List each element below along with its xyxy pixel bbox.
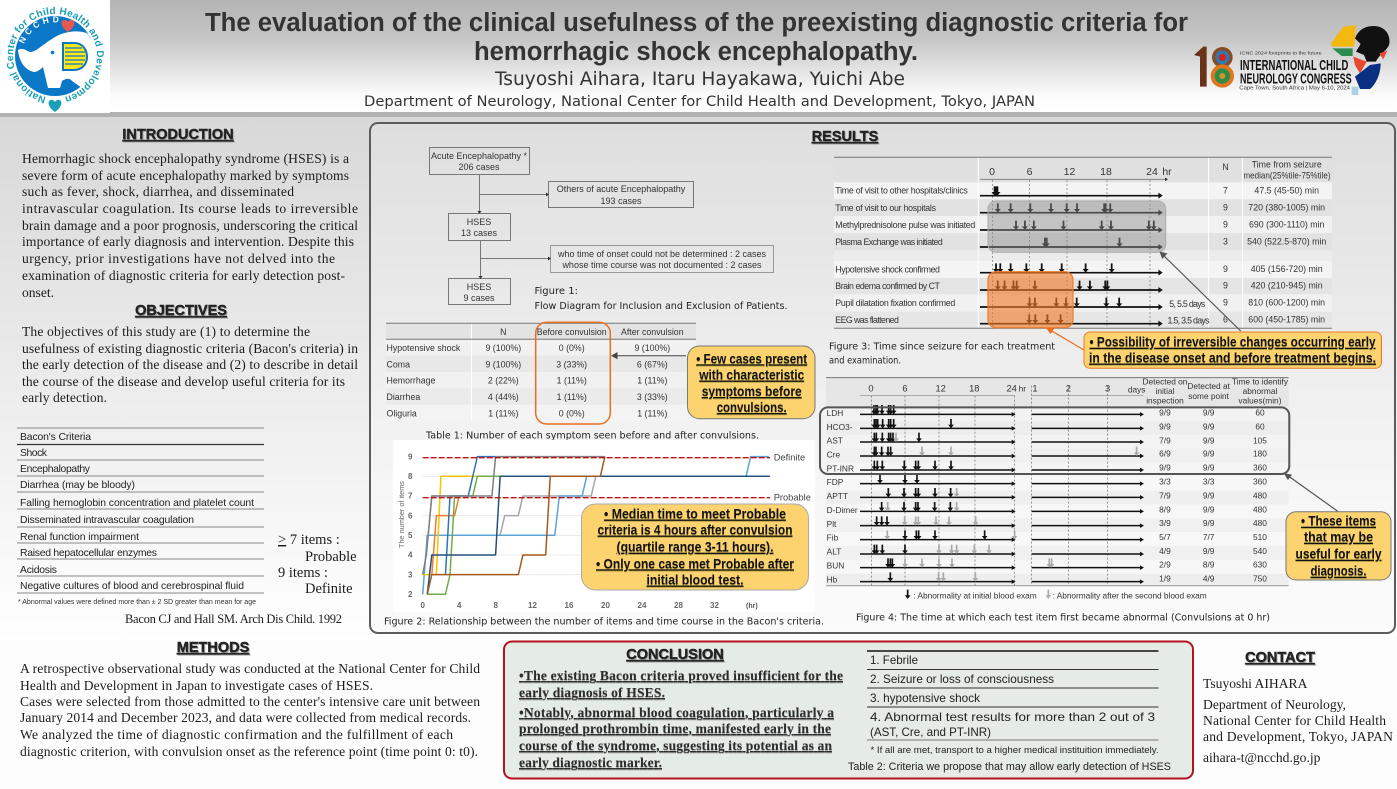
figure 3: timeline chart: 6: [1027, 166, 1033, 178]
table values: 60: [1255, 421, 1265, 431]
panel: results: [370, 123, 1395, 633]
table 1: symptoms before and after convulsions: 6 (67%): [637, 359, 668, 369]
callout: useful items: useful for early: [1296, 547, 1382, 562]
callout: few cases: with characteristic: [698, 368, 805, 382]
right notes and values: 720 (380-1005) min: [1248, 202, 1325, 212]
right notes and values: 540 (522.5-870) min: [1247, 236, 1326, 246]
section: introduction: INTRODUCTION: [122, 127, 234, 143]
table 1: symptoms before and after convulsions: After convulsion: [621, 327, 684, 337]
conclusion text: •Notably, abnormal blood coagulation, particularly a: [519, 705, 834, 720]
table 1: symptoms before and after convulsions: Hypotensive shock: [386, 343, 461, 353]
table values: 7/9: [1159, 435, 1171, 445]
table: Bacon's criteria: Negative cultures of blood and cerebrospinal fluid: [20, 581, 244, 592]
table 1: symptoms before and after convulsions: 0 (0%): [559, 343, 585, 353]
table: Bacon's criteria: * Abnormal values were defined more than ± 2 SD greater than mean for age: [18, 599, 256, 606]
table values: values(min): [1238, 395, 1282, 405]
row labels: Cre: [827, 450, 840, 460]
table values: 510: [1253, 532, 1267, 542]
arrow: callout to highlighted rows: [1285, 474, 1338, 512]
methods text: Health and Development in Japan to investigate cases of HSES.: [20, 678, 373, 693]
overlay: early changes group: [988, 272, 1073, 328]
contact details: National Center for Child Health: [1203, 713, 1386, 728]
figure 3: timeline chart: 0: [989, 166, 995, 178]
reference: Bacon CJ and Hall SM. Arch Dis Child. 1992: [125, 612, 342, 626]
table 2: proposed criteria: [848, 651, 1171, 773]
section: objectives: [22, 303, 358, 405]
contact details: and Development, Tokyo, JAPAN: [1203, 729, 1393, 744]
callout: few cases: symptoms before: [702, 384, 802, 399]
table values: 9/9: [1203, 504, 1215, 514]
table 1: symptoms before and after convulsions: 9 (100%): [485, 359, 521, 369]
row labels: APTT: [827, 491, 848, 501]
table: Bacon's criteria: Shock: [20, 448, 48, 459]
criteria thresholds: Probable: [305, 549, 357, 565]
table 1: symptoms before and after convulsions: 2 (22%): [488, 376, 519, 386]
callout: median time: initial blood test.: [646, 572, 744, 588]
right notes and values: 600 (450-1785) min: [1248, 314, 1325, 324]
table values: 360: [1253, 463, 1267, 473]
right notes and values: 9: [1223, 264, 1228, 274]
callout: useful items: diagnosis.: [1310, 564, 1366, 579]
callout: irreversible changes: [1084, 332, 1382, 368]
figure 4: first abnormal time chart: [820, 376, 1289, 600]
figure 2: line chart: 8: [494, 601, 498, 610]
objectives text: usefulness of existing diagnostic criteria (Bacon's criteria) in: [22, 341, 358, 357]
right notes and values: 405 (156-720) min: [1251, 264, 1323, 274]
table 2: proposed criteria: Table 2: Criteria we propose that may allow early detection of HSES: [848, 761, 1171, 773]
introduction text: severe form of acute encephalopathy marked by symptoms: [22, 168, 349, 183]
table values: 7/7: [1203, 532, 1215, 542]
introduction text: [22, 151, 358, 300]
row labels: Time of visit to our hospitals: [835, 203, 937, 213]
figure 1: flow diagram: Acute Encephalopathy *: [431, 151, 528, 161]
conclusion text: early diagnosis of HSES.: [519, 685, 665, 700]
table 2: proposed criteria: 3. hypotensive shock: [870, 691, 981, 705]
objectives text: the early detection of the disease and (2) to describe in detail: [22, 357, 358, 373]
axis labels: [868, 384, 1145, 394]
criteria thresholds: Definite: [305, 581, 353, 597]
section: methods: METHODS: [177, 640, 250, 656]
figure 1: flow diagram: Figure 1:: [534, 286, 578, 297]
table values: 2/9: [1159, 559, 1171, 569]
introduction text: brain damage and a poor prognosis, underscoring the critical: [22, 218, 358, 233]
right notes and values: 6: [1223, 314, 1228, 324]
table values: initial: [1155, 386, 1175, 396]
conclusion text: •The existing Bacon criteria proved insufficient for the: [519, 668, 843, 683]
table values: 9/9: [1203, 463, 1215, 473]
panel: results: RESULTS: [812, 129, 879, 145]
figure 2: line chart: 24: [638, 601, 647, 610]
figure 1: flow diagram: Others of acute Encephalopathy: [557, 184, 686, 194]
figure 2: line chart: 32: [710, 601, 719, 610]
axis labels: 3: [1105, 384, 1110, 394]
callout: median time: [582, 504, 808, 590]
axis labels: 1: [1032, 384, 1038, 394]
contact details: Department of Neurology,: [1203, 697, 1346, 712]
table values: 4/9: [1203, 573, 1215, 583]
table values: 750: [1253, 573, 1267, 583]
figure 2: line chart: 0: [420, 601, 426, 610]
table values: [1143, 376, 1289, 583]
row labels: Hb: [827, 574, 838, 584]
table values: 9/9: [1203, 435, 1215, 445]
figure 4 caption: Figure 4: The time at which each test item first became abnormal (Convulsions at 0 hr): [856, 612, 1270, 624]
contact details: Tsuyoshi AIHARA: [1203, 676, 1308, 691]
criteria thresholds: > 7 items :: [278, 532, 340, 548]
figure 3: timeline chart: [834, 157, 1332, 328]
right notes and values: 9: [1223, 202, 1228, 212]
introduction text: Hemorrhagic shock encephalopathy syndrome (HSES) is a: [22, 151, 349, 167]
arrow: callout to grey group: [1160, 252, 1241, 331]
table: Bacon's criteria: Bacon's Criteria: [20, 432, 91, 443]
table values: inspection: [1146, 395, 1184, 405]
table values: some point: [1188, 391, 1230, 401]
callout: median time: • Only one case met Probable after: [596, 556, 795, 571]
figure 1: flow diagram: 13 cases: [461, 228, 498, 238]
row baselines: [860, 414, 1140, 582]
table values: Detected on: [1143, 376, 1188, 386]
right notes and values: 420 (210-945) min: [1251, 280, 1323, 290]
table values: abnormal: [1243, 386, 1277, 396]
table values: 105: [1253, 435, 1267, 445]
row labels: Brain edema confirmed by CT: [835, 281, 941, 291]
table values: 9/9: [1203, 490, 1215, 500]
section: introduction: [22, 127, 358, 300]
table 1: symptoms before and after convulsions: 0 (0%): [559, 409, 585, 419]
arrow: callout to before-convulsion column: [612, 353, 686, 358]
arrows: after second blood exam: [884, 433, 1139, 582]
figure 2: line chart: 5: [408, 531, 413, 540]
right notes and values: 9: [1223, 280, 1228, 290]
table: Bacon's criteria: [17, 428, 264, 606]
logo: international child neurology congress: [1194, 25, 1390, 95]
table values: 480: [1253, 504, 1267, 514]
table 1: symptoms before and after convulsions: 4 (44%): [488, 392, 519, 402]
figure 2: line chart: Definite: [774, 452, 805, 462]
axis labels: 0: [868, 384, 874, 394]
table 1: symptoms before and after convulsions: Diarrhea: [386, 392, 420, 402]
table values: 480: [1253, 518, 1267, 528]
row labels: BUN: [827, 560, 844, 570]
figure 1: flow diagram: whose time course was not documented : 2 cases: [561, 260, 762, 270]
row labels: [835, 186, 975, 325]
row labels: Time of visit to other hospitals/clinics: [835, 186, 968, 196]
figure 2: line chart: 3: [408, 570, 413, 580]
figure 2: line chart: 6: [408, 512, 413, 520]
arrows: initial blood exam: [871, 405, 987, 582]
title: [205, 9, 1188, 66]
row labels: LDH: [827, 408, 843, 418]
authors: Tsuyoshi Aihara, Itaru Hayakawa, Yuichi Abe: [494, 68, 905, 90]
axis labels: 6: [902, 384, 908, 394]
figure 2 caption: Figure 2: Relationship between the number of items and time course in the Bacon's criteria.: [384, 616, 824, 628]
table values: 1/9: [1159, 573, 1171, 583]
highlight: before convulsion column: [536, 322, 610, 424]
methods text: A retrospective observational study was conducted at the National Center for Child: [20, 661, 480, 676]
objectives text: The objectives of this study are (1) to determine the: [22, 324, 310, 340]
right notes and values: Time from seizure: [1252, 159, 1322, 169]
row labels: Hypotensive shock confirmed: [835, 264, 940, 274]
table 1: symptoms before and after convulsions: Before convulsion: [537, 327, 607, 337]
axis labels: 2: [1066, 384, 1071, 394]
arrow: callout to orange group: [1047, 328, 1084, 350]
table values: 9/9: [1159, 421, 1171, 431]
table values: 4/9: [1159, 546, 1171, 556]
legend: : Abnormality at initial blood exam: [913, 590, 1037, 600]
figure 1: flow diagram: 193 cases: [600, 196, 642, 206]
callout: few cases: [688, 346, 815, 419]
figure 1: flow diagram: 9 cases: [463, 293, 495, 303]
right notes and values: 7: [1223, 186, 1228, 196]
figure 1: flow diagram: HSES: [467, 282, 491, 292]
contact details: aihara-t@ncchd.go.jp: [1203, 750, 1321, 765]
methods text: We analyzed the time of diagnostic confirmation and the fulfillment of each: [20, 727, 453, 742]
table 1: symptoms before and after convulsions: Coma: [386, 359, 410, 369]
introduction text: onset.: [22, 285, 54, 300]
table 2: proposed criteria: 2. Seizure or loss of consciousness: [870, 672, 1054, 686]
introduction text: urgency, prior investigations have not delved into the: [22, 251, 335, 266]
logo: international child neurology congress: Cape Town, South Africa | May 6-10, 2024: [1239, 85, 1350, 91]
section: contact: CONTACT: [1245, 650, 1315, 666]
callout: useful items: [1286, 512, 1391, 580]
conclusion text: course of the syndrome, suggesting its potential as an: [519, 738, 832, 753]
axis labels: days: [1128, 384, 1145, 394]
right notes and values: 1.5, 3.5 days: [1168, 316, 1210, 326]
table: Bacon's criteria: Diarrhea (may be bloody): [20, 480, 135, 491]
right notes and values: N: [1222, 162, 1229, 172]
table 1: symptoms before and after convulsions: 3 (33%): [556, 359, 587, 369]
figure 2: line chart: [393, 440, 815, 612]
table values: 480: [1253, 490, 1267, 500]
table: Bacon's criteria: Renal function impairment: [20, 532, 139, 543]
table values: 8/9: [1203, 559, 1215, 569]
figure 2: line chart: 2: [408, 590, 413, 599]
table 1: symptoms before and after convulsions: N: [500, 327, 506, 337]
logo: international child neurology congress: ICNC 2024 footprints to the future: [1240, 50, 1322, 56]
row labels: PT-INR: [827, 464, 854, 474]
section: objectives: OBJECTIVES: [135, 303, 227, 319]
introduction text: importance of early diagnosis and intervention. Despite this: [22, 234, 354, 249]
table: Bacon's criteria: Falling hemoglobin concentration and platelet count: [20, 498, 254, 509]
table values: 7/9: [1159, 490, 1171, 500]
figure 2: line chart: 20: [601, 601, 610, 610]
objectives text: early detection.: [22, 390, 107, 405]
callout: useful items: that may be: [1304, 530, 1373, 545]
table: Bacon's criteria: Encephalopathy: [20, 464, 91, 475]
table values: 360: [1253, 476, 1267, 486]
callout: median time: • Median time to meet Probable: [604, 506, 786, 522]
table values: 9/9: [1203, 421, 1215, 431]
figure 2: line chart: 7: [408, 492, 413, 501]
right notes and values: [1168, 159, 1331, 326]
figure 2: line chart: 16: [564, 601, 574, 610]
row labels: [827, 408, 858, 584]
callout: median time: criteria is 4 hours after convulsion: [598, 522, 792, 538]
table values: Time to identify: [1232, 376, 1289, 386]
table values: 60: [1255, 408, 1265, 418]
methods text: [20, 661, 480, 760]
figure 2: line chart: 12: [528, 601, 537, 610]
table 1: symptoms before and after convulsions: 3 (33%): [637, 392, 668, 402]
legend: : Abnormality after the second blood exam: [1053, 590, 1207, 600]
table 1: symptoms before and after convulsions: 1 (11%): [488, 409, 518, 419]
table values: Detected at: [1187, 381, 1231, 391]
methods text: January 2014 and December 2023, and data were collected from medical records.: [20, 710, 471, 725]
table: Bacon's criteria: Raised hepatocellular enzymes: [20, 548, 157, 559]
table 1: symptoms before and after convulsions: [386, 322, 696, 424]
table values: 3/3: [1203, 476, 1215, 486]
table values: 9/9: [1159, 408, 1171, 418]
objectives text: the course of the disease and develop useful criteria for its: [22, 374, 345, 389]
callout: useful items: • These items: [1301, 514, 1376, 529]
table values: 3/9: [1159, 518, 1171, 528]
row labels: Pupil dilatation fixation confirmed: [835, 298, 955, 308]
table values: 9/9: [1203, 449, 1215, 459]
table 1: symptoms before and after convulsions: Oliguria: [386, 409, 417, 419]
methods text: diagnostic criterion, with convulsion onset as the reference point (time point 0: t0).: [20, 744, 478, 760]
figure 3: timeline chart: 24: [1146, 166, 1158, 178]
table 1: symptoms before and after convulsions: Hemorrhage: [386, 376, 436, 386]
row labels: ALT: [827, 547, 841, 557]
callout: few cases: convulsions.: [717, 400, 787, 415]
conclusion text: early diagnostic marker.: [519, 755, 662, 770]
section: contact: [1203, 650, 1393, 765]
table 2: proposed criteria: 1. Febrile: [870, 653, 918, 667]
figure 3: timeline chart: 18: [1100, 166, 1112, 178]
figure 2: line chart: (hr): [746, 603, 758, 610]
figure 2: line chart: 4: [408, 551, 413, 560]
row timelines: [980, 186, 1163, 327]
table 2: proposed criteria: 4. Abnormal test results for more than 2 out of 3: [870, 710, 1155, 724]
table values: 9/9: [1203, 518, 1215, 528]
figure 1: flow diagram: Flow Diagram for Inclusion and Exclusion of Patients.: [534, 301, 788, 312]
logo: NCCHD elephant: NCCHD: [18, 16, 58, 44]
figure 3: timeline chart: hr: [1162, 166, 1172, 178]
table values: 8/9: [1159, 504, 1171, 514]
right notes and values: 810 (600-1200) min: [1248, 298, 1325, 308]
row labels: AST: [827, 436, 843, 446]
table values: 540: [1253, 546, 1267, 556]
figure 1: flow diagram: HSES: [467, 217, 491, 227]
table 1: symptoms before and after convulsions: 1 (11%): [637, 376, 667, 386]
criteria thresholds: [278, 532, 357, 597]
callout: few cases: • Few cases present: [696, 351, 808, 366]
criteria thresholds: 9 items :: [278, 565, 328, 581]
right notes and values: median(25%tile-75%tile): [1244, 170, 1331, 180]
table values: 5/7: [1159, 532, 1171, 542]
right notes and values: 47.5 (45-50) min: [1254, 186, 1319, 196]
panel: conclusion: [504, 642, 1193, 778]
figure 2: line chart: 9: [408, 452, 413, 462]
title: hemorrhagic shock encephalopathy.: [474, 38, 918, 66]
row labels: EEG was flattened: [835, 315, 899, 325]
table 1: symptoms before and after convulsions: 9 (100%): [485, 343, 521, 353]
figure 3 caption: and examination.: [829, 356, 901, 366]
table 1: symptoms before and after convulsions: 9 (100%): [634, 343, 670, 353]
axis labels: hr: [1019, 384, 1026, 394]
figure 1: flow diagram: [430, 148, 788, 312]
table values: 9/9: [1203, 408, 1215, 418]
table: Bacon's criteria: Disseminated intravascular coagulation: [20, 515, 194, 526]
conclusion text: prolonged prothrombin time, manifested early in the: [519, 721, 831, 736]
overlay: treatment group: [988, 201, 1166, 252]
figure 3 caption: Figure 3: Time since seizure for each treatment: [829, 342, 1055, 352]
row labels: Plt: [827, 519, 837, 529]
table values: 6/9: [1159, 449, 1171, 459]
table values: 9/9: [1203, 546, 1215, 556]
section: methods: [20, 640, 480, 760]
figure 3: timeline chart: 12: [1064, 166, 1075, 178]
figure 2: line chart: 8: [408, 472, 413, 481]
panel: conclusion: CONCLUSION: [626, 647, 724, 663]
right notes and values: 5, 5.5 days: [1169, 299, 1206, 309]
figure 3 caption: [829, 342, 1055, 366]
table 2: proposed criteria: (AST, Cre, and PT-INR): [870, 725, 991, 739]
right notes and values: 9: [1223, 220, 1228, 230]
row labels: Plasma Exchange was initiated: [835, 237, 943, 247]
table 1 caption: Table 1: Number of each symptom seen before and after convulsions.: [425, 430, 759, 442]
highlight: early rows: [820, 407, 1289, 474]
contact details: [1203, 676, 1393, 765]
figure 2: line chart: 28: [674, 601, 683, 610]
figure 2: line chart: 4: [457, 601, 462, 610]
introduction text: examination of diagnostic criteria for early detection post-: [22, 268, 345, 283]
table 1: symptoms before and after convulsions: 1 (11%): [637, 409, 667, 419]
table: Bacon's criteria: Acidosis: [20, 565, 57, 576]
table 2: proposed criteria: * If all are met, transport to a higher medical instituition immediately.: [870, 745, 1158, 755]
figure 1: flow diagram: who time of onset could not be determined : 2 cases: [557, 249, 767, 259]
methods text: Cases were selected from those admitted to the center's intensive care unit between: [20, 694, 480, 709]
table values: 630: [1253, 559, 1267, 569]
figure 1: flow diagram: 206 cases: [458, 162, 500, 172]
table values: 9/9: [1159, 463, 1171, 473]
conclusion text: [519, 668, 843, 770]
axis labels: 24: [1006, 384, 1017, 394]
row labels: Methylprednisolone pulse was initiated: [835, 220, 975, 230]
introduction text: such as fever, shock, diarrhea, and disseminated: [22, 184, 294, 199]
right notes and values: 3: [1223, 236, 1228, 246]
table values: 3/3: [1159, 476, 1171, 486]
right notes and values: 9: [1223, 298, 1228, 308]
right notes and values: 690 (300-1110) min: [1249, 220, 1325, 230]
table 1: symptoms before and after convulsions: 1 (11%): [557, 392, 587, 402]
introduction text: intravascular coagulation. Its course leads to irreversible: [22, 201, 358, 216]
title: The evaluation of the clinical usefulness of the preexisting diagnostic criteria for: [205, 9, 1188, 37]
row labels: D-Dimer: [827, 505, 858, 515]
legend: [905, 590, 1207, 600]
table values: 180: [1253, 449, 1267, 459]
row labels: HCO3-: [827, 422, 853, 432]
figure 2: line chart: Probable: [774, 492, 811, 502]
objectives text: [22, 324, 358, 405]
figure 2: line chart: The number of items: [397, 481, 406, 548]
row labels: Fib: [827, 533, 839, 543]
row labels: FDP: [827, 477, 844, 487]
table 1: symptoms before and after convulsions: 1 (11%): [557, 376, 587, 386]
axis labels: 12: [935, 384, 946, 394]
axis labels: 18: [969, 384, 980, 394]
affiliation: Department of Neurology, National Center for Child Health and Development, Tokyo, JAPAN: [364, 94, 1035, 110]
callout: median time: (quartile range 3-11 hours).: [616, 540, 774, 555]
